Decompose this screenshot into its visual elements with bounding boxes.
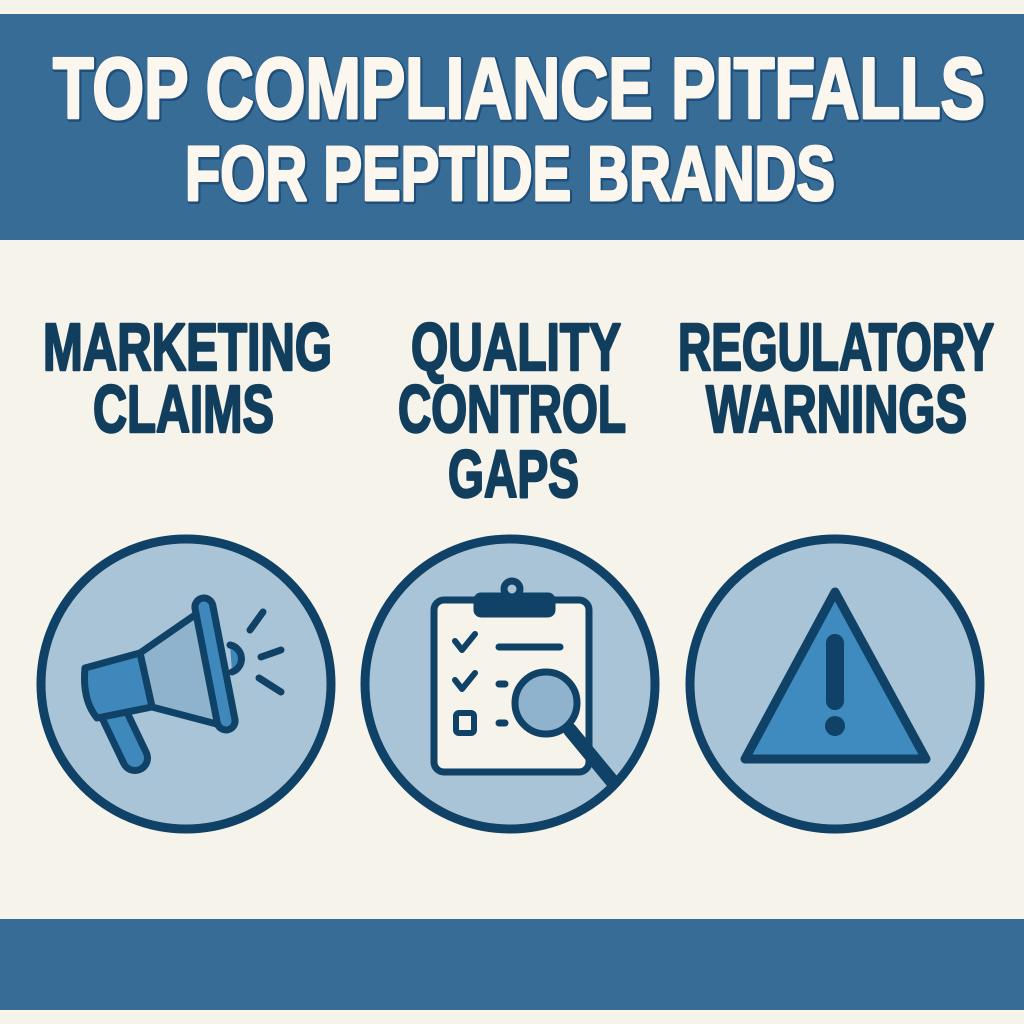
icon: megaphone	[41, 539, 331, 829]
heading: marketing claims	[43, 310, 332, 447]
heading: quality control gaps: GAPS	[448, 437, 579, 512]
heading: quality control gaps: CONTROL	[398, 372, 626, 447]
footer band	[0, 919, 1024, 1010]
heading: regulatory warnings	[678, 310, 994, 447]
heading: quality control gaps: QUALITY	[411, 310, 621, 385]
header band	[0, 14, 1024, 240]
icon: clipboard with magnifier	[365, 539, 655, 829]
icon: warning triangle	[690, 539, 980, 829]
heading: marketing claims: MARKETING	[43, 310, 332, 385]
title: FOR PEPTIDE BRANDS	[185, 131, 835, 217]
heading: quality control gaps	[398, 310, 626, 512]
title	[53, 41, 986, 218]
heading: marketing claims: CLAIMS	[93, 372, 274, 447]
